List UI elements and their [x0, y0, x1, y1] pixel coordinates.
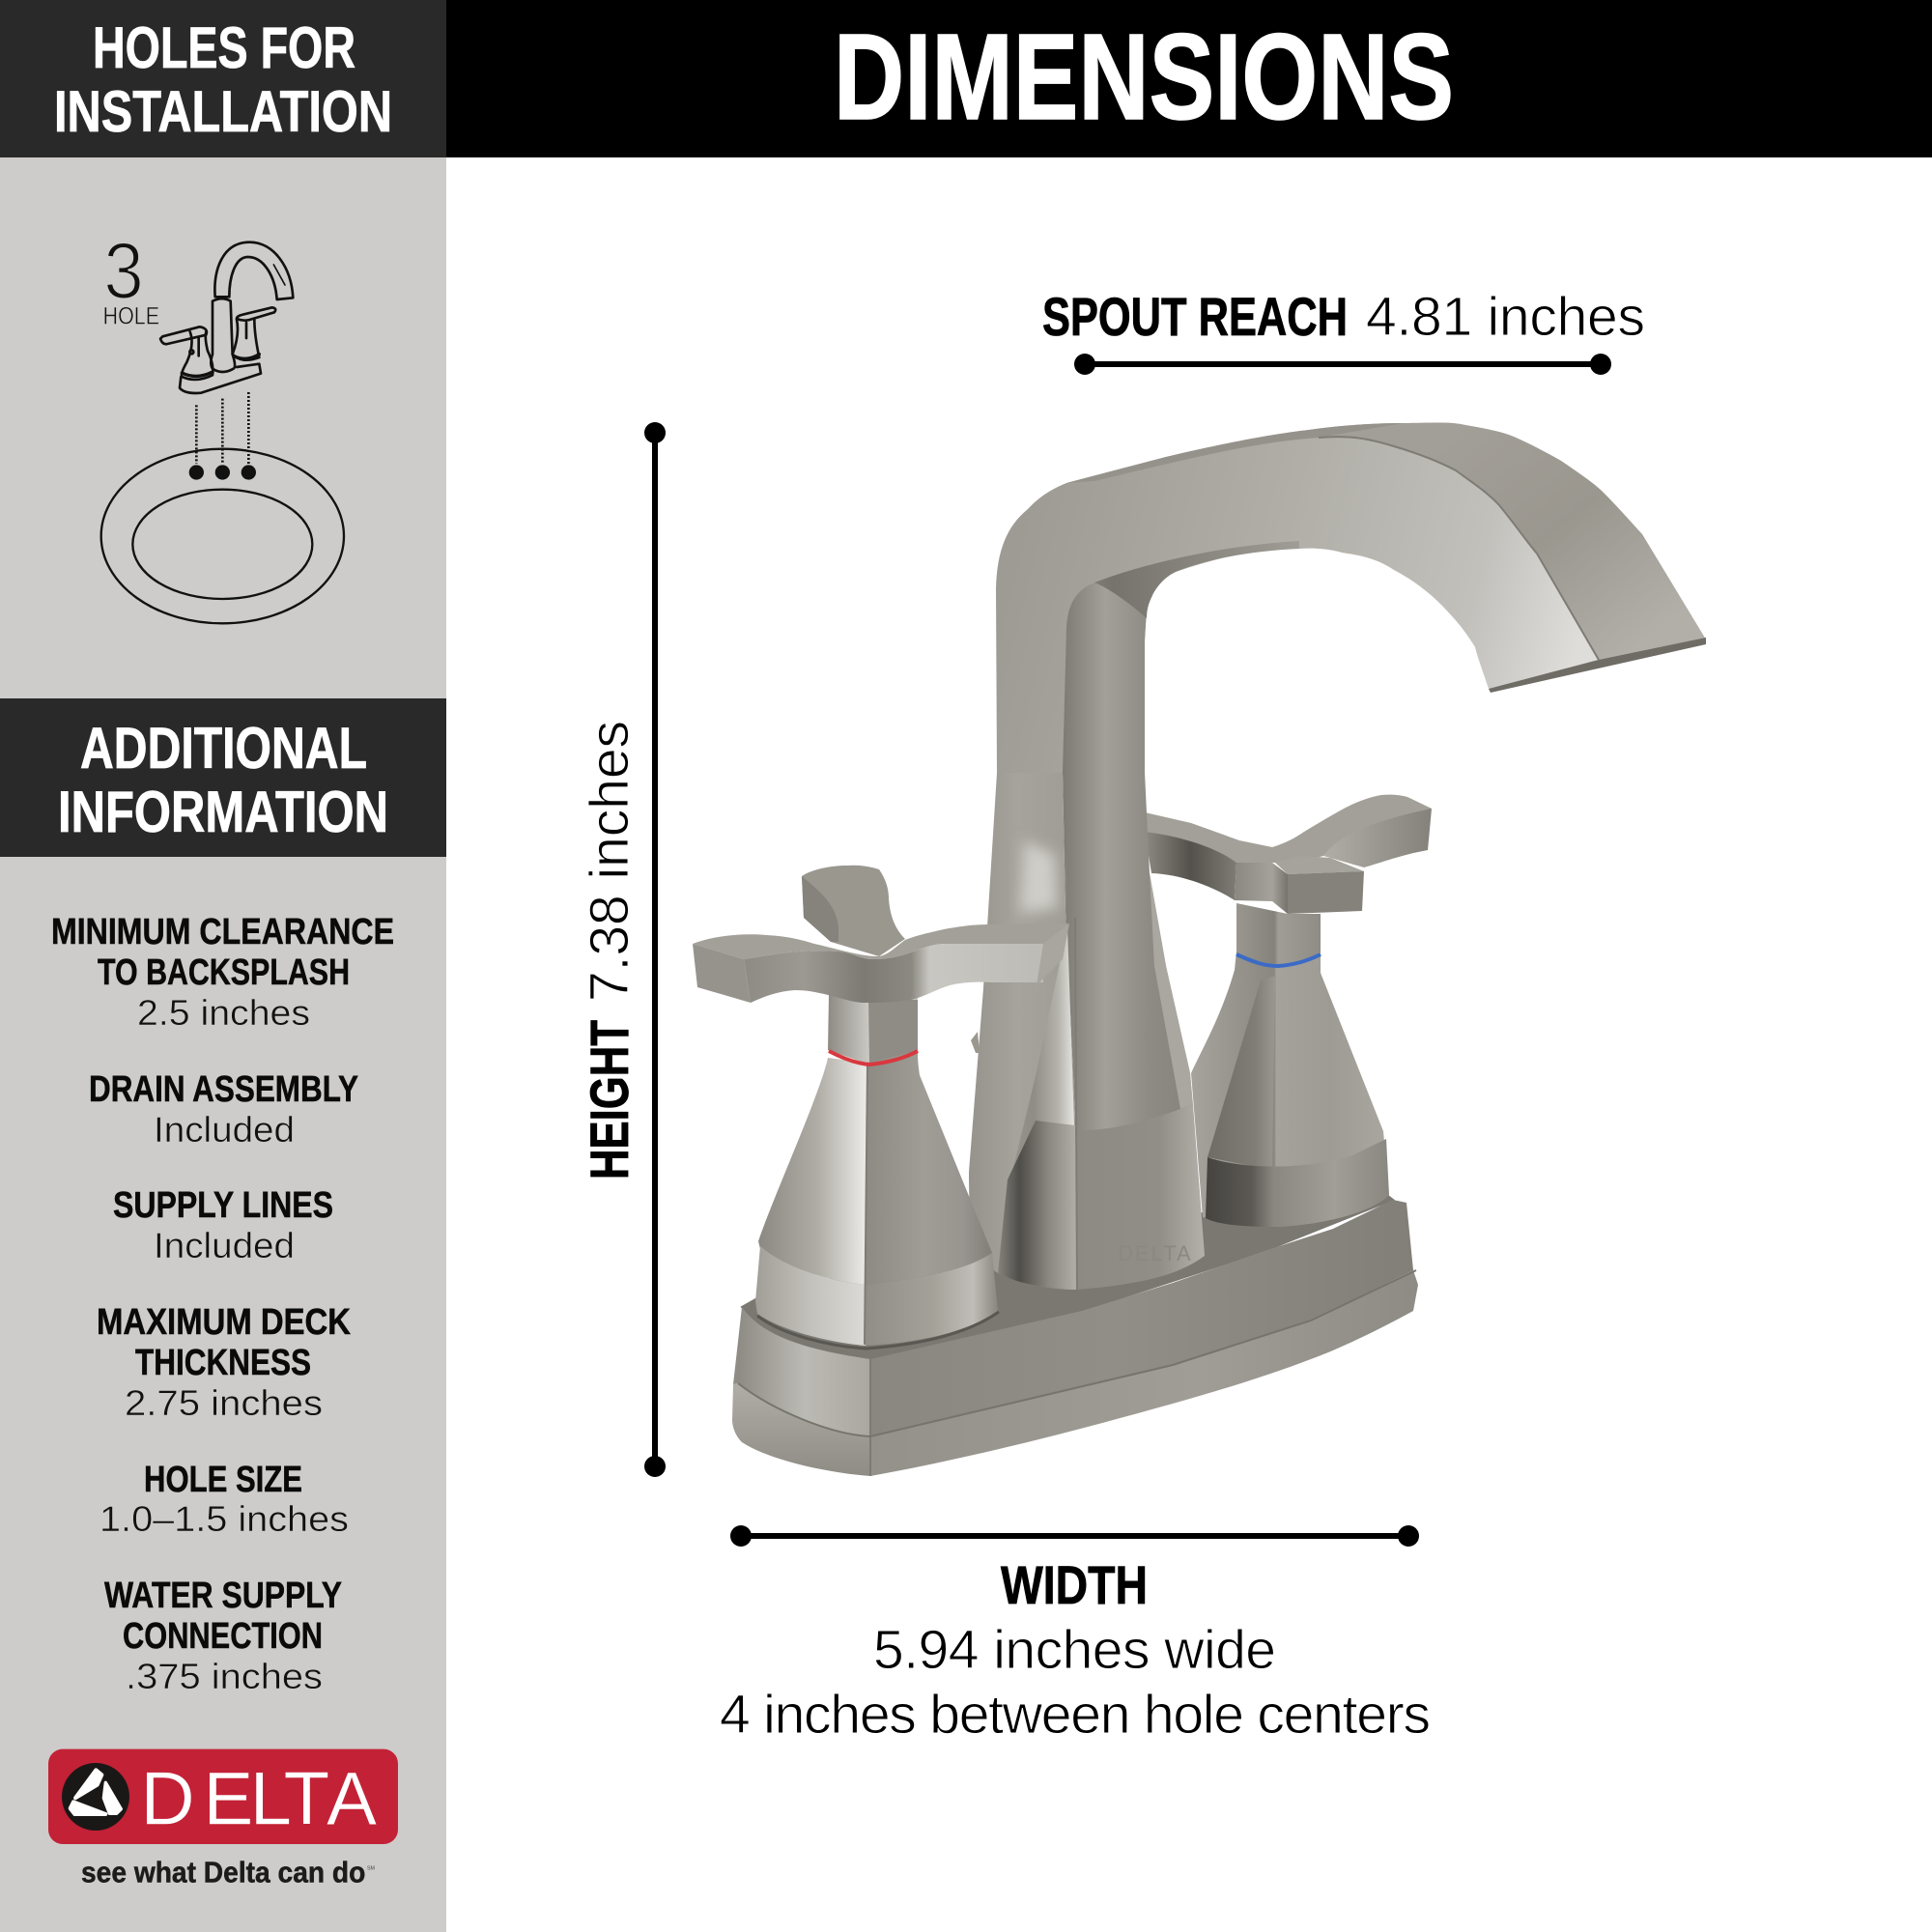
- dimension: width: WIDTH: [1001, 1554, 1148, 1615]
- spec: drain assembly: DRAIN ASSEMBLY: [89, 1069, 358, 1110]
- red indicator ring: [829, 1051, 918, 1065]
- spec: maximum deck thickness: MAXIMUM DECK: [97, 1302, 351, 1343]
- spec: minimum clearance: 2.5 inches: [137, 993, 310, 1033]
- heading: additional information: ADDITIONAL: [80, 716, 367, 781]
- spec: water supply connection: [104, 1576, 342, 1696]
- left handle: [693, 866, 1069, 1349]
- spec: hole size: 1.0–1.5 inches: [99, 1499, 349, 1539]
- spec: hole size: [99, 1460, 349, 1539]
- blue indicator ring: [1236, 954, 1321, 966]
- drain knob: [971, 1032, 980, 1053]
- spec: minimum clearance: TO BACKSPLASH: [98, 952, 350, 993]
- right handle: [1145, 795, 1432, 1227]
- spec: water supply connection: CONNECTION: [123, 1616, 323, 1657]
- faucet base: [732, 1183, 1418, 1476]
- heading: holes for installation: HOLES FOR: [93, 15, 355, 80]
- heading: holes for installation: [0, 0, 446, 157]
- spec: drain assembly: Included: [154, 1110, 295, 1150]
- label: 3 hole: HOLE: [103, 303, 159, 330]
- spec: supply lines: [113, 1185, 333, 1265]
- dimension: height: [579, 422, 666, 1477]
- logo on faucet: DELTA: [1118, 1241, 1193, 1265]
- heading: additional information: [0, 698, 446, 857]
- dimension: spout reach: 4.81 inches: [1366, 286, 1645, 348]
- logo badge: [48, 1749, 398, 1844]
- dimension: spout reach: SPOUT REACH: [1042, 286, 1348, 347]
- title: dimensions: DIMENSIONS: [834, 9, 1454, 145]
- dimension: height: HEIGHT: [579, 1020, 639, 1179]
- product: faucet: [693, 423, 1706, 1476]
- spec: maximum deck thickness: [97, 1302, 351, 1423]
- spec: water supply connection: .375 inches: [126, 1657, 323, 1696]
- icon: dotted lines: [196, 392, 248, 464]
- heading: holes for installation: INSTALLATION: [54, 79, 392, 144]
- icon: faucet outline: [160, 242, 293, 393]
- spec: minimum clearance: [51, 912, 394, 1033]
- spec: supply lines: SUPPLY LINES: [113, 1185, 333, 1226]
- logo mark: [62, 1763, 129, 1831]
- spec: maximum deck thickness: THICKNESS: [135, 1343, 311, 1383]
- dimension: spout reach: [1042, 286, 1645, 375]
- heading: additional information: INFORMATION: [58, 780, 388, 844]
- spec: hole size: HOLE SIZE: [144, 1460, 302, 1500]
- tagline: SM: [367, 1865, 375, 1871]
- spec: water supply connection: WATER SUPPLY: [104, 1576, 342, 1616]
- spec: drain assembly: [89, 1069, 358, 1150]
- label: 3 hole: 3: [103, 225, 144, 315]
- panel: sidebar: [0, 157, 446, 1932]
- label: 3 hole: [103, 225, 159, 330]
- dimension: width: 4 inches between hole centers: [720, 1684, 1431, 1746]
- spec: maximum deck thickness: 2.75 inches: [125, 1383, 323, 1423]
- logo: delta: [48, 1749, 398, 1889]
- dimension: width: [720, 1525, 1431, 1746]
- spec: minimum clearance: MINIMUM CLEARANCE: [51, 912, 394, 952]
- icon: sink: [101, 449, 344, 623]
- logo wordmark: DELTA: [140, 1755, 377, 1840]
- tagline: see what Delta can do: [81, 1856, 365, 1889]
- icon: 3 hole faucet and sink: [101, 225, 344, 623]
- spec: supply lines: Included: [154, 1226, 295, 1265]
- title: dimensions: [446, 0, 1932, 157]
- dimension: width: 5.94 inches wide: [873, 1619, 1276, 1681]
- spout and column: [969, 423, 1706, 1290]
- dimension: height: 7.38 inches: [579, 721, 640, 1002]
